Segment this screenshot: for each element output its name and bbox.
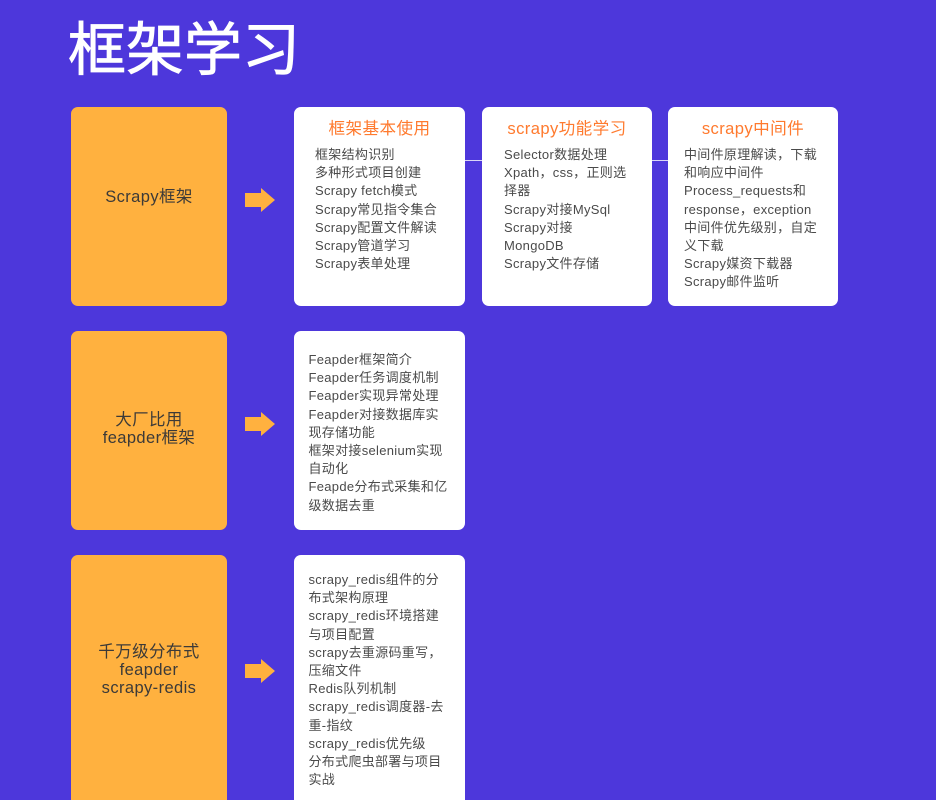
list: 框架基本使用 items xyxy=(315,147,437,271)
panel: scrapy_redis items xyxy=(294,555,465,800)
panel: Scrapy框架 label: Scrapy框架 xyxy=(105,188,193,206)
list: scrapy功能学习 items: 择器 xyxy=(504,183,531,198)
panel: 大厂比用 feapder框架 label xyxy=(71,331,227,530)
list: scrapy功能学习 items: Xpath，css，正则选 xyxy=(504,165,626,180)
list: scrapy_redis items: 与项目配置 xyxy=(308,627,375,642)
panel: scrapy中间件 xyxy=(668,107,838,306)
list: scrapy中间件 items: Scrapy媒资下载器 xyxy=(684,256,793,271)
panel: 大厂比用 feapder框架 label: 大厂比用 xyxy=(115,411,183,429)
panel: scrapy功能学习 xyxy=(482,107,652,306)
panel: scrapy中间件: scrapy中间件 xyxy=(702,119,804,138)
list: scrapy中间件 items: 和响应中间件 xyxy=(684,165,764,180)
list: scrapy功能学习 items: Scrapy文件存储 xyxy=(504,256,599,271)
list: scrapy中间件 items: 中间件原理解读，下载 xyxy=(684,147,817,162)
panel: 千万级分布式 label xyxy=(71,555,227,800)
list: scrapy中间件 items: Process_requests和 xyxy=(684,183,806,198)
list: scrapy功能学习 items xyxy=(504,147,626,271)
title: 框架学习 xyxy=(68,18,300,83)
list: feapder items: 级数据去重 xyxy=(308,498,375,513)
list: scrapy中间件 items: Scrapy邮件监听 xyxy=(684,274,779,289)
list: feapder items: 现存储功能 xyxy=(308,425,375,440)
list: 框架基本使用 items: Scrapy管道学习 xyxy=(315,238,410,253)
panel: 千万级分布式 label: feapder xyxy=(120,661,178,679)
list: scrapy_redis items: 压缩文件 xyxy=(308,663,362,678)
list: scrapy_redis items: scrapy_redis调度器-去 xyxy=(308,699,444,714)
panel: Scrapy框架 label xyxy=(71,107,227,306)
list: scrapy_redis items: 实战 xyxy=(308,772,335,787)
panel: 千万级分布式 label: scrapy-redis xyxy=(102,679,196,697)
list: scrapy功能学习 items: Selector数据处理 xyxy=(504,147,607,162)
list: scrapy_redis items: scrapy_redis优先级 xyxy=(308,736,426,751)
list: scrapy_redis items: scrapy_redis环境搭建 xyxy=(308,608,439,623)
list: scrapy中间件 items: 义下载 xyxy=(684,238,724,253)
list: feapder items: Feapder对接数据库实 xyxy=(308,407,439,422)
list: scrapy中间件 items: response，exception xyxy=(684,202,812,217)
list: scrapy_redis items: scrapy去重源码重写， xyxy=(308,645,442,660)
list: feapder items: Feapder任务调度机制 xyxy=(308,370,439,385)
arrow: row 1 xyxy=(245,188,275,212)
list: feapder items: Feapde分布式采集和亿 xyxy=(308,479,448,494)
list: feapder items: Feapder实现异常处理 xyxy=(308,388,439,403)
panel: 框架基本使用 xyxy=(294,107,465,306)
list: scrapy功能学习 items: Scrapy对接 xyxy=(504,220,573,235)
list: scrapy_redis items: 分布式爬虫部署与项目 xyxy=(308,754,442,769)
list: scrapy功能学习 items: MongoDB xyxy=(504,238,564,253)
list: 框架基本使用 items: 多种形式项目创建 xyxy=(315,165,421,180)
list: scrapy中间件 items: 中间件优先级别，自定 xyxy=(684,220,817,235)
list: scrapy中间件 items xyxy=(684,147,817,289)
list: 框架基本使用 items: Scrapy常见指令集合 xyxy=(315,202,437,217)
panel: feapder items xyxy=(294,331,465,530)
list: feapder items xyxy=(308,352,448,513)
list: 框架基本使用 items: Scrapy配置文件解读 xyxy=(315,220,437,235)
list: feapder items: Feapder框架简介 xyxy=(308,352,412,367)
list: scrapy_redis items: scrapy_redis组件的分 xyxy=(308,572,439,587)
list: scrapy_redis items xyxy=(308,572,444,787)
arrow: row 2 xyxy=(245,412,275,436)
list: scrapy_redis items: 布式架构原理 xyxy=(308,590,388,605)
panel: 框架基本使用: 框架基本使用 xyxy=(329,119,430,138)
list: 框架基本使用 items: Scrapy表单处理 xyxy=(315,256,410,271)
list: scrapy功能学习 items: Scrapy对接MySql xyxy=(504,202,610,217)
list: scrapy_redis items: Redis队列机制 xyxy=(308,681,396,696)
panel: 大厂比用 feapder框架 label: feapder框架 xyxy=(103,429,195,447)
list: 框架基本使用 items: 框架结构识别 xyxy=(315,147,395,162)
list: feapder items: 自动化 xyxy=(308,461,348,476)
list: scrapy_redis items: 重-指纹 xyxy=(308,718,353,733)
arrow: row 3 xyxy=(245,659,275,683)
panel: 千万级分布式 label: 千万级分布式 xyxy=(98,643,200,661)
panel: scrapy功能学习: scrapy功能学习 xyxy=(507,119,627,138)
list: feapder items: 框架对接selenium实现 xyxy=(308,443,443,458)
list: 框架基本使用 items: Scrapy fetch模式 xyxy=(315,183,417,198)
